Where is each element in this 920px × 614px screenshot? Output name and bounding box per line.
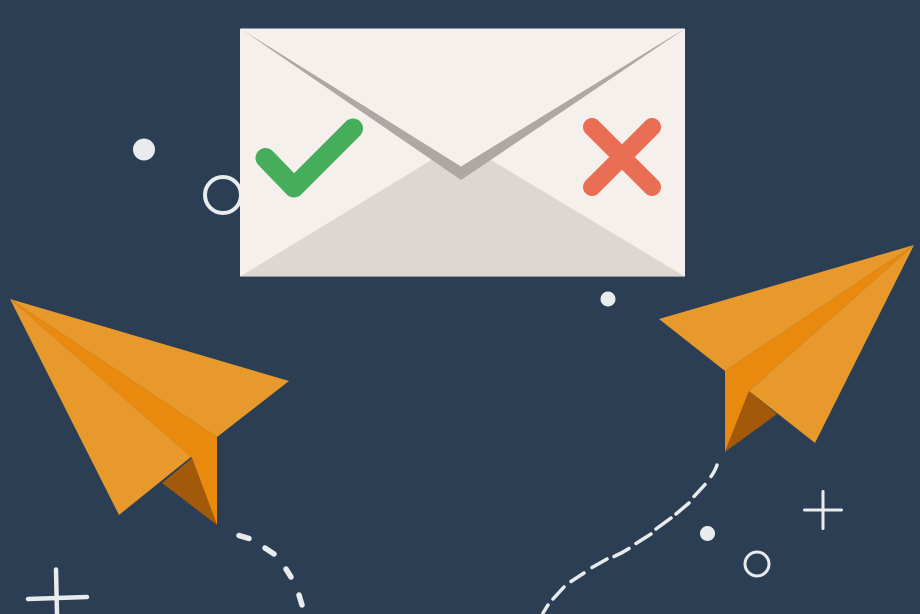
- plane lower wing: [10, 299, 191, 515]
- envelope: [240, 28, 685, 276]
- icon: plus lower right: [804, 492, 842, 528]
- plane centre fold: [725, 245, 914, 452]
- icon: ring behind envelope: [205, 177, 241, 213]
- plane top wing: [10, 299, 289, 437]
- plane lower wing: [749, 245, 914, 443]
- plane top wing: [659, 245, 914, 371]
- icon: solid dot lower right: [700, 526, 715, 541]
- envelope body: [240, 29, 685, 276]
- envelope flap: [240, 28, 685, 166]
- envelope flap shadow: [244, 30, 683, 180]
- icon: ring lower right: [745, 552, 769, 576]
- dashed flight path right: [543, 465, 717, 613]
- icon: solid dot below envelope: [600, 292, 616, 306]
- envelope bottom fold: [241, 142, 684, 276]
- icon: red cross: [592, 127, 652, 187]
- icon: solid dot upper left: [133, 138, 155, 160]
- icon: green check mark: [266, 128, 353, 188]
- icon: plus lower left: [28, 570, 87, 614]
- dashed flight path left: [239, 536, 302, 605]
- plane underside: [725, 391, 777, 452]
- right paper plane: [659, 245, 914, 452]
- plane centre fold: [10, 299, 217, 525]
- plane underside: [162, 458, 217, 525]
- left paper plane: [10, 299, 289, 525]
